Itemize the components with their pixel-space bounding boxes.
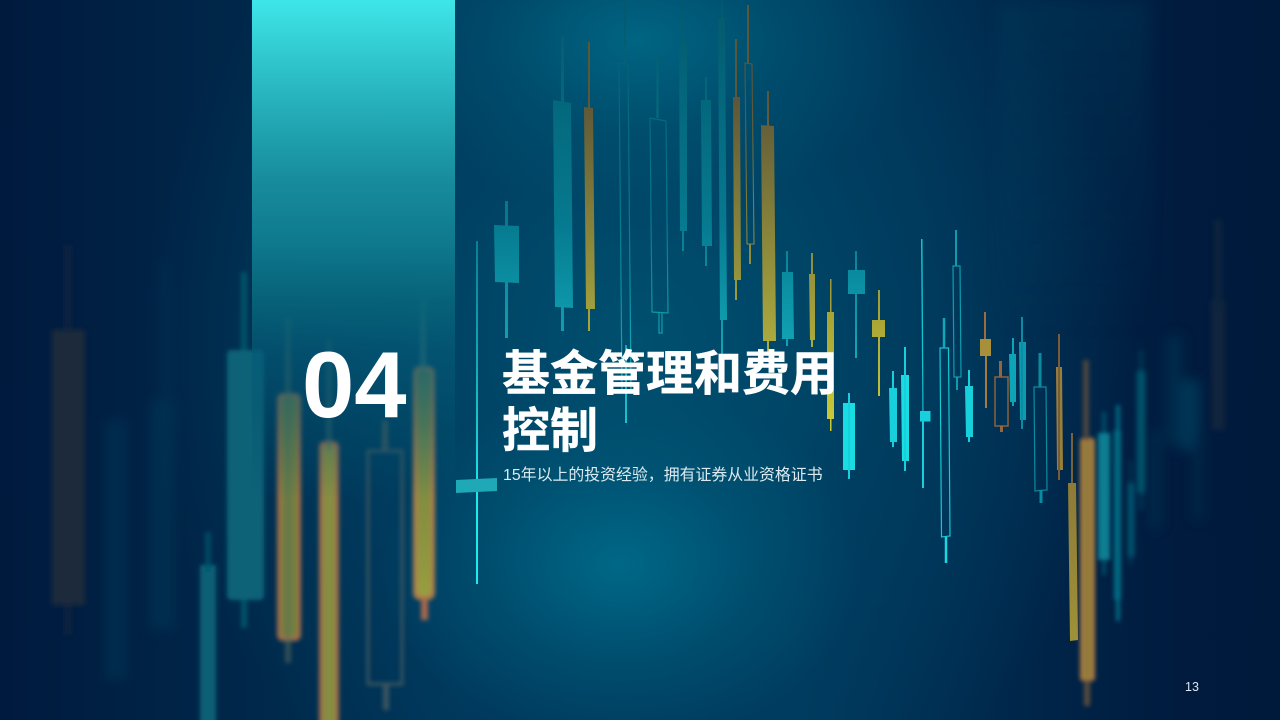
page number: 13 [1185,680,1199,694]
candles: outlined [619,0,668,390]
candles: gold [584,39,815,355]
subtitle: 15年以上的投资经验，拥有证券从业资格证书 [503,467,823,484]
candles: outlined lower [940,230,1047,563]
candle: gold outlined [745,5,754,264]
section number: 04 [302,332,407,437]
blurred candles: left side [52,245,435,720]
candles: gold lower [827,279,885,431]
candles: orange [980,312,1078,641]
background light band [1000,0,1150,340]
candles: upper cluster [456,0,865,584]
panel: cyan gradient column [252,0,455,500]
section title: 基金管理和费用控制 [502,348,838,458]
candles: lower bright cyan [843,239,1026,488]
blurred candles: right side [1080,220,1225,706]
